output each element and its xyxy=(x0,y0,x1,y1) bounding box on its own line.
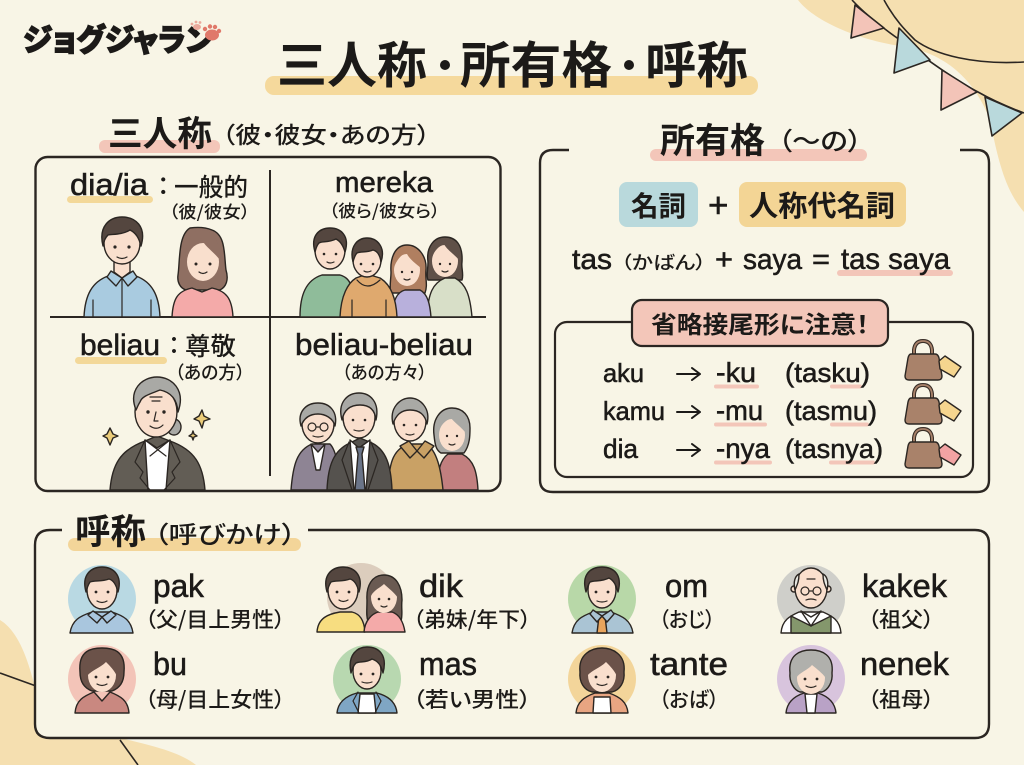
avatar: pak xyxy=(68,565,136,633)
cell: beliau: 尊敬 xyxy=(185,327,236,363)
label: tante: （おば） xyxy=(659,684,719,714)
label: bu xyxy=(145,646,285,714)
cell: dia/ia: dia/ia xyxy=(70,167,149,202)
callout label xyxy=(632,300,888,346)
label: tante: tante xyxy=(650,646,728,682)
heading: 所有格 xyxy=(650,113,867,164)
example sentence: （かばん） xyxy=(621,249,706,275)
cell: beliau-beliau: beliau-beliau xyxy=(295,327,473,362)
row: dia: dia xyxy=(603,434,639,464)
row: aku: -ku xyxy=(716,357,756,388)
title: 所有格 xyxy=(460,26,612,98)
suffix underlines xyxy=(716,386,873,462)
formula chip: 名詞 xyxy=(619,182,698,227)
illustration: group of four xyxy=(300,228,472,317)
label: om: om xyxy=(665,568,708,604)
label: pak: pak xyxy=(153,568,205,604)
row: kamu xyxy=(603,395,877,426)
label: mas: mas xyxy=(419,646,477,682)
cell: beliau: beliau xyxy=(80,329,160,362)
label: mas xyxy=(413,646,531,714)
decoration: top right blob xyxy=(798,0,1024,212)
label: bu: bu xyxy=(153,646,187,682)
row: kamu: -mu xyxy=(716,395,763,426)
illustration: man xyxy=(84,217,160,317)
panel: 呼称 xyxy=(35,504,989,738)
heading: 三人称: 三人称 xyxy=(108,106,212,157)
example sentence: tas saya xyxy=(841,243,950,276)
panel: 三人称 xyxy=(36,157,500,491)
arrows xyxy=(677,368,700,456)
label: dik: （弟妹/年下） xyxy=(413,604,531,634)
label: nenek: nenek xyxy=(860,646,950,682)
row: aku: (tasku) xyxy=(785,358,870,388)
heading: 呼称 xyxy=(68,504,301,555)
icon: bag with yellow tag xyxy=(905,341,961,380)
cell: beliau: ： xyxy=(168,326,180,361)
heading: 所有格: （～の） xyxy=(778,122,862,158)
illustration: elderly group of four xyxy=(291,393,478,490)
row: dia: (tasnya) xyxy=(785,434,883,464)
heading: 呼称: 呼称 xyxy=(75,504,146,555)
label: mas: （若い男性） xyxy=(413,684,531,714)
title: 三人称 xyxy=(277,26,427,98)
row: dia xyxy=(603,433,883,464)
formula chip: 人称代名詞: 人称代名詞 xyxy=(749,183,895,225)
callout label: 省略接尾形に注意！ xyxy=(651,305,869,340)
row: dia: -nya xyxy=(716,433,770,464)
label: dik: dik xyxy=(419,568,464,604)
label: kakek: （祖父） xyxy=(868,604,934,634)
label: nenek: （祖母） xyxy=(868,684,934,714)
label: om: （おじ） xyxy=(659,604,715,634)
avatar: tante xyxy=(568,645,636,713)
label: kakek: kakek xyxy=(862,568,948,604)
example sentence xyxy=(572,243,953,276)
label: kakek xyxy=(862,568,948,634)
cell: dia/ia: ： xyxy=(157,167,170,203)
label: pak: （父/目上男性） xyxy=(145,604,285,634)
avatar: bu xyxy=(68,645,136,713)
title xyxy=(265,26,758,98)
cell: beliau-beliau: （あの方々） xyxy=(342,359,427,385)
panel: 所有格 xyxy=(540,150,989,492)
label: bu: （母/目上女性） xyxy=(145,684,285,714)
decoration: bottom left strings xyxy=(0,673,138,765)
label: nenek xyxy=(860,646,950,714)
example sentence: saya xyxy=(743,244,803,276)
row: aku: aku xyxy=(603,358,644,388)
plus sign: + xyxy=(708,186,728,225)
cell: dia/ia: （彼/彼女） xyxy=(169,198,250,223)
row: kamu: (tasmu) xyxy=(785,396,877,426)
row: kamu: kamu xyxy=(603,396,665,426)
avatar: mas xyxy=(333,645,401,713)
heading: 所有格: 所有格 xyxy=(660,113,765,164)
logo: ジョグジャラン xyxy=(23,15,213,60)
label: dik xyxy=(413,568,531,634)
cell: dia/ia: 一般的 xyxy=(174,168,248,204)
cell: beliau-beliau xyxy=(295,327,473,385)
icon: bag with yellow tag xyxy=(905,385,961,424)
heading: 三人称: （彼・彼女・あの方） xyxy=(222,116,430,150)
formula chip: 名詞: 名詞 xyxy=(631,185,686,225)
cell: mereka: mereka xyxy=(335,167,434,199)
cell: beliau: （あの方） xyxy=(175,359,245,385)
label: tante xyxy=(650,646,728,714)
example sentence: + xyxy=(715,244,733,276)
heading: 呼称: （呼びかけ） xyxy=(154,515,296,550)
illustration: elderly person with sparkles xyxy=(103,377,210,490)
avatar: om xyxy=(568,565,636,633)
example sentence: tas xyxy=(572,244,612,276)
illustration: woman xyxy=(172,227,233,317)
cell: beliau xyxy=(75,326,245,385)
bunting garland xyxy=(851,0,1024,136)
example sentence: = xyxy=(812,244,830,276)
label: om xyxy=(659,568,715,634)
icon: bag with pink tag xyxy=(905,429,961,468)
row: aku xyxy=(603,357,870,388)
inner box: suffix notes xyxy=(555,300,973,477)
avatar: nenek xyxy=(777,645,845,713)
label: pak xyxy=(145,568,285,634)
heading: 三人称 xyxy=(99,106,430,157)
cell: mereka: （彼ら/彼女ら） xyxy=(329,197,440,222)
decoration: bottom left blob xyxy=(0,620,196,765)
cell: mereka xyxy=(329,167,440,222)
cell: dia/ia xyxy=(67,167,250,223)
title: 呼称 xyxy=(645,26,748,98)
avatar: kakek xyxy=(777,565,845,633)
avatar: dik xyxy=(317,563,405,632)
